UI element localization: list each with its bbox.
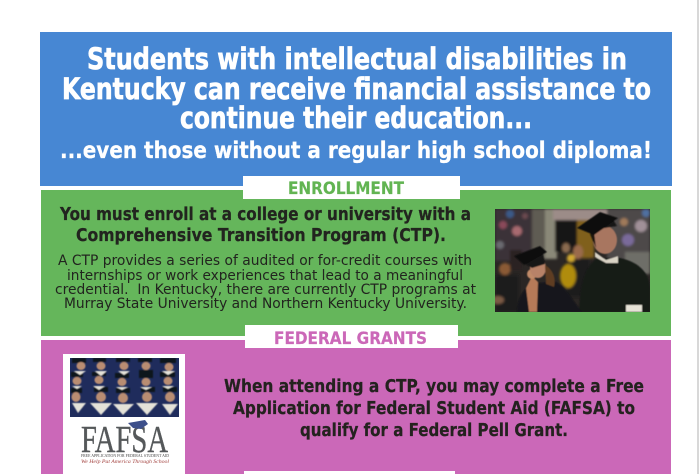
logo tagline: We Help Put America Through School (81, 459, 170, 465)
label: federal grants: FEDERAL GRANTS (274, 329, 427, 349)
panel: enrollment (41, 190, 671, 336)
enrollment body text (55, 253, 476, 312)
label: next section tab (244, 471, 455, 474)
label: federal grants (245, 325, 458, 349)
federal grants text: qualify for a Federal Pell Grant. (300, 420, 568, 441)
enrollment body text: Murray State University and Northern Kentucky University. (64, 296, 467, 312)
logo tagline (81, 453, 170, 465)
image: FAFSA logo card (63, 354, 185, 474)
enrollment heading text (59, 204, 471, 246)
enrollment heading text: You must enroll at a college or university with a (59, 204, 471, 225)
panel: title banner (40, 32, 672, 186)
logo tagline: FREE APPLICATION FOR FEDERAL STUDENT AID (81, 453, 169, 458)
label: enrollment: ENROLLMENT (288, 179, 404, 199)
label: enrollment (243, 176, 460, 199)
panel: federal grants (41, 340, 671, 474)
federal grants text: Application for Federal Student Aid (FAFSA) to (233, 398, 635, 419)
photo: graduates (492, 209, 650, 312)
enrollment heading text: Comprehensive Transition Program (CTP). (76, 225, 446, 246)
enrollment body text: A CTP provides a series of audited or for-credit courses with (58, 253, 472, 269)
title (62, 42, 651, 135)
logo wordmark: FAFSA (81, 419, 168, 461)
enrollment body text: internships or work experiences that lead to a meaningful (67, 268, 463, 284)
enrollment body text: credential. In Kentucky, there are currently CTP programs at (55, 282, 476, 298)
title: continue their education... (180, 101, 532, 135)
logo cap icon (128, 420, 148, 429)
federal grants text (224, 376, 644, 441)
